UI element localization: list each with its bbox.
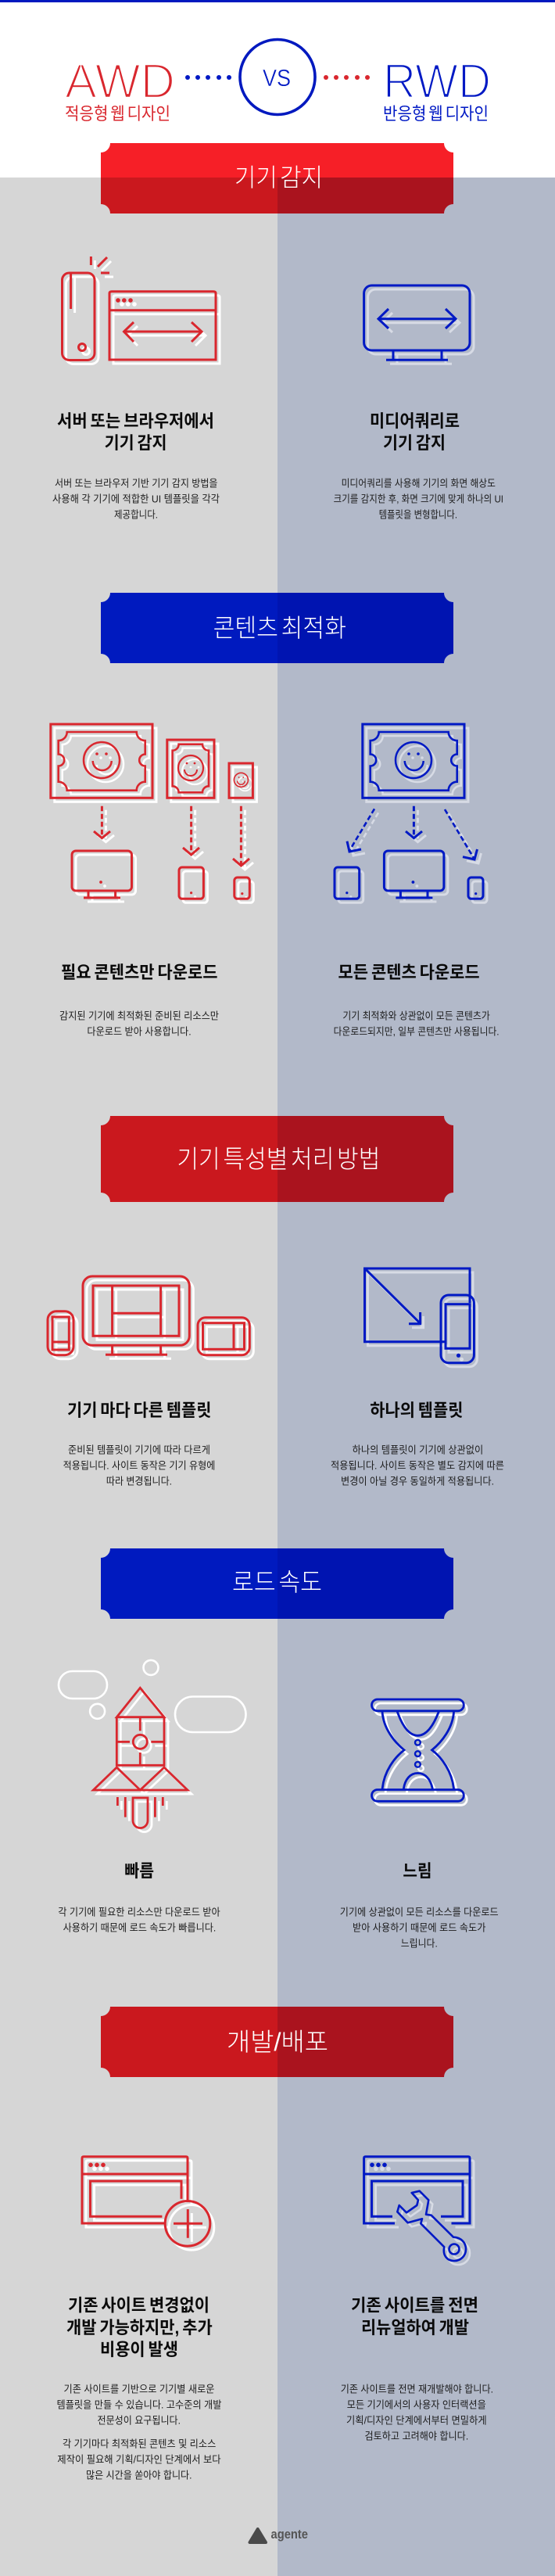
banner: load speed xyxy=(101,1548,453,1619)
text: RWD detection xyxy=(334,477,503,521)
text: RWD templates xyxy=(331,1444,504,1487)
icon: browser with wrench xyxy=(364,2157,474,2265)
icon: RWD bill and devices xyxy=(335,724,487,902)
banner: content optimization xyxy=(101,593,453,663)
title: AWD: AWD xyxy=(65,55,175,109)
text: AWD development: 전문성이 요구됩니다. xyxy=(97,2415,181,2426)
icon: hourglass xyxy=(372,1699,467,1805)
text: AWD development: 제작이 필요해 기획/디자인 단계에서 보다 xyxy=(57,2454,221,2465)
text: RWD speed xyxy=(340,1907,499,1949)
text: AWD content: 다운로드 받아 사용합니다. xyxy=(87,1026,192,1037)
banner: development and deployment xyxy=(101,2007,453,2077)
heading: slow: 느림 xyxy=(403,1861,431,1881)
banner: load speed: 로드 속도 xyxy=(232,1568,322,1596)
heading: AWD development: 기존 사이트 변경없이 xyxy=(68,2296,209,2315)
banner: device detection: 기기 감지 xyxy=(235,163,323,192)
heading: only needed content: 필요 콘텐츠만 다운로드 xyxy=(61,963,217,982)
heading: single template: 하나의 템플릿 xyxy=(370,1401,463,1420)
banner: device detection xyxy=(101,143,453,213)
text: AWD templates: 준비된 템플릿이 기기에 따라 다르게 xyxy=(68,1444,210,1456)
icon: browser with plus xyxy=(82,2157,214,2250)
text: RWD templates: 적용됩니다. 사이트 동작은 별도 감지에 따른 xyxy=(331,1459,504,1472)
text: RWD templates: 변경이 아닐 경우 동일하게 적용됩니다. xyxy=(341,1475,494,1487)
dotted connector left xyxy=(185,75,231,80)
text: RWD development: 기존 사이트를 전면 재개발해야 합니다. xyxy=(341,2384,493,2395)
text: RWD content xyxy=(334,1010,500,1037)
VS badge xyxy=(240,39,315,114)
text: RWD speed: 느립니다. xyxy=(401,1938,438,1949)
banner: content optimization: 콘텐츠 최적화 xyxy=(213,614,346,642)
logo: agente: agente xyxy=(270,2528,308,2542)
icon: screen scaling to phone xyxy=(364,1268,477,1367)
text: AWD templates: 따라 변경됩니다. xyxy=(106,1475,172,1487)
heading: different templates: 기기 마다 다른 템플릿 xyxy=(67,1401,211,1420)
text: RWD speed: 받아 사용하기 때문에 로드 속도가 xyxy=(353,1922,485,1933)
text: AWD speed: 사용하기 때문에 로드 속도가 빠릅니다. xyxy=(63,1922,216,1933)
heading: server or browser detection: 서버 또는 브라우저에서 xyxy=(57,411,214,431)
text: AWD content xyxy=(59,1010,219,1037)
text: RWD development: 모든 기기에서의 사용자 인터랙션을 xyxy=(347,2399,486,2410)
heading: server or browser detection: 기기 감지 xyxy=(105,433,167,453)
text: RWD development: 검토하고 고려해야 합니다. xyxy=(364,2431,468,2441)
text: AWD speed xyxy=(58,1907,220,1933)
text: RWD content: 기기 최적화와 상관없이 모든 콘텐츠가 xyxy=(342,1010,490,1021)
text: RWD content: 다운로드되지만, 일부 콘텐츠만 사용됩니다. xyxy=(334,1026,500,1037)
text: RWD development xyxy=(341,2384,493,2441)
text: RWD detection: 크기를 감지한 후, 화면 크기에 맞게 하나의 UI xyxy=(334,493,503,505)
banner: handling by device xyxy=(101,1116,453,1202)
heading: media query detection xyxy=(370,411,460,453)
banner: development and deployment: 개발/배포 xyxy=(227,2028,328,2056)
text: AWD speed: 각 기기에 필요한 리소스만 다운로드 받아 xyxy=(58,1907,220,1918)
icon: monitor with arrow xyxy=(364,285,474,364)
text: RWD detection: 템플릿을 변형합니다. xyxy=(379,508,457,521)
text: AWD detection: 제공합니다. xyxy=(114,508,158,521)
icon: three devices with layouts xyxy=(48,1276,253,1359)
text: RWD detection: 미디어쿼리를 사용해 기기의 화면 해상도 xyxy=(342,477,496,490)
title: RWD: RWD xyxy=(383,55,491,109)
text: AWD templates xyxy=(63,1444,215,1487)
text: AWD templates: 적용됩니다. 사이트 동작은 기기 유형에 xyxy=(63,1459,215,1472)
text: RWD speed: 기기에 상관없이 모든 리소스를 다운로드 xyxy=(340,1907,499,1918)
icon: AWD bills and devices xyxy=(51,724,256,902)
text: AWD development: 기존 사이트를 기반으로 기기별 새로운 xyxy=(64,2384,215,2395)
text: RWD templates: 하나의 템플릿이 기기에 상관없이 xyxy=(353,1444,483,1456)
text: AWD detection: 서버 또는 브라우저 기반 기기 감지 방법을 xyxy=(55,477,218,490)
text: AWD development: 각 기기마다 최적화된 콘텐츠 및 리소스 xyxy=(63,2438,216,2449)
banner: handling by device: 기기 특성별 처리 방법 xyxy=(177,1145,380,1173)
heading: AWD development xyxy=(66,2296,213,2359)
heading: fast: 빠름 xyxy=(124,1861,154,1881)
heading: media query detection: 기기 감지 xyxy=(383,433,446,453)
logo: agente xyxy=(250,2528,308,2542)
heading: server or browser detection xyxy=(57,411,214,453)
title: RWD: 반응형 웹 디자인 xyxy=(383,104,489,124)
heading: AWD development: 비용이 발생 xyxy=(100,2340,178,2359)
heading: media query detection: 미디어쿼리로 xyxy=(370,411,460,431)
heading: RWD development xyxy=(351,2296,478,2337)
heading: all content: 모든 콘텐츠 다운로드 xyxy=(338,963,480,982)
dotted connector right xyxy=(324,75,370,80)
text: AWD development: 많은 시간을 쏟아야 합니다. xyxy=(86,2470,192,2481)
text: AWD development: 템플릿을 만들 수 있습니다. 고수준의 개발 xyxy=(56,2399,222,2410)
icon: phone and browser xyxy=(63,257,220,364)
text: AWD detection: 사용해 각 기기에 적합한 UI 템플릿을 각각 xyxy=(52,493,220,505)
text: AWD detection xyxy=(52,477,220,521)
icon: rocket with clouds xyxy=(59,1660,245,1832)
text: RWD development: 기획/디자인 단계에서부터 면밀하게 xyxy=(346,2415,487,2426)
heading: AWD development: 개발 가능하지만, 추가 xyxy=(66,2318,213,2337)
heading: RWD development: 기존 사이트를 전면 xyxy=(351,2296,478,2315)
heading: RWD development: 리뉴얼하여 개발 xyxy=(361,2318,469,2337)
text: AWD content: 감지된 기기에 최적화된 준비된 리소스만 xyxy=(59,1010,219,1021)
VS badge: VS xyxy=(263,64,291,91)
text: AWD development xyxy=(56,2384,222,2481)
title: AWD: 적응형 웹 디자인 xyxy=(65,104,170,124)
